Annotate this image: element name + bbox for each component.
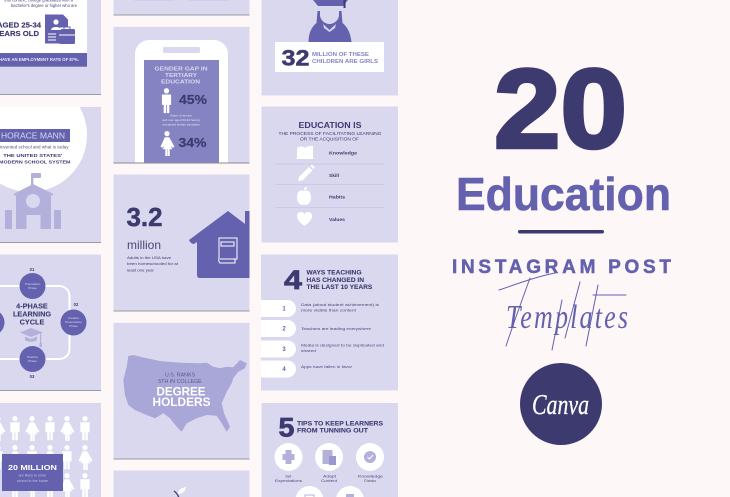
item 4 xyxy=(261,360,353,378)
callout: 20 million: 20 MILLION xyxy=(8,463,57,472)
text: school description: MODERN SCHOOL SYSTEM xyxy=(0,160,71,164)
icon: heart xyxy=(297,212,312,226)
heading: 4 ways: WAYS TEACHING xyxy=(306,270,362,276)
tip: knowledge checks xyxy=(356,443,384,483)
divider bar xyxy=(518,230,604,234)
icon: pencil xyxy=(298,164,315,181)
panel: Horace Mann xyxy=(0,107,101,243)
panel: gender gap phone xyxy=(114,26,250,164)
text: ranks: 5TH IN COLLEGE xyxy=(158,379,202,385)
item 1: more visible than content xyxy=(301,308,357,312)
tip: adapt content xyxy=(315,443,343,483)
stat: 3.2 million: 3.2 xyxy=(126,204,162,232)
heading: 4 ways xyxy=(284,265,373,295)
stat box: 32 million: 32 xyxy=(282,46,310,70)
panel: U.S. map xyxy=(114,322,250,460)
icon: book xyxy=(296,146,314,159)
stat box: 32 million xyxy=(275,42,384,72)
item 2: Teachers are leading everywhere xyxy=(301,326,371,331)
item: knowledge: Knowledge xyxy=(329,150,358,156)
stat: 3.2 million: million xyxy=(127,238,161,252)
item 1 xyxy=(261,300,379,317)
text: ranks: U.S. RANKS xyxy=(165,372,195,378)
heading: degree holders: DEGREE xyxy=(156,385,206,399)
heading: 4 ways: THE LAST 10 YEARS xyxy=(306,284,373,291)
map silhouette xyxy=(123,355,247,432)
icon: documents and briefcase xyxy=(45,14,75,44)
stat box: 32 million: MILLION OF THESE xyxy=(312,52,369,58)
heading: 5 tips: TIPS TO KEEP LEARNERS xyxy=(297,420,383,428)
script: templates: Templates xyxy=(506,298,628,336)
phase 4 xyxy=(0,310,4,336)
panel: homeschooled xyxy=(114,174,250,312)
callout: 20 million: are likely to enter xyxy=(18,474,47,478)
text: share description: and men aged 30-34 having xyxy=(162,118,200,122)
title: 4-phase learning cycle: 4-PHASE xyxy=(16,302,48,310)
heading: 5 tips xyxy=(278,412,383,442)
text: homeschool detail: Adults in the USA have xyxy=(127,255,171,260)
item 3: shared xyxy=(301,348,316,353)
phase 3: Phase xyxy=(28,359,37,363)
panel: top cropped xyxy=(114,0,250,16)
text: homeschool detail xyxy=(127,255,179,272)
heading: 5 tips: FROM TUNNING OUT xyxy=(297,428,368,434)
icon: school building xyxy=(5,173,61,229)
item 2 xyxy=(261,320,371,337)
heading: degree holders xyxy=(152,385,210,409)
heading: 5 tips: 5 xyxy=(278,412,294,442)
panel: 5 tips xyxy=(262,403,398,497)
tip: set expectations: Set xyxy=(285,474,292,478)
icon: apple xyxy=(297,187,311,205)
text: share description xyxy=(162,114,200,126)
heading: gender gap: EDUCATION xyxy=(161,80,200,86)
item: values: Values xyxy=(329,217,346,222)
title: 4-phase learning cycle: LEARNING xyxy=(13,310,51,318)
phase 2: Creative xyxy=(68,316,79,320)
phase 1 xyxy=(20,267,46,299)
banner: employment rate: HAVE AN EMPLOYMENT RATE OF 87%. xyxy=(0,57,79,62)
phase 2: Presentation xyxy=(65,320,82,324)
text: share description: completed tertiary education xyxy=(162,122,200,126)
people pictogram xyxy=(0,416,92,497)
title: 4-phase learning cycle xyxy=(13,302,51,326)
text: definition: THE PROCESS OF FACILITATING LEARNING xyxy=(278,131,382,136)
item 4: Apps have fallen in favor xyxy=(301,364,353,369)
title: 4-phase learning cycle: CYCLE xyxy=(20,318,44,326)
heading: aged 25-34 xyxy=(0,20,42,38)
name banner: HORACE MANN xyxy=(1,132,65,141)
panel: education is xyxy=(262,106,398,242)
item 3: 3 xyxy=(282,347,286,353)
icon: graduate xyxy=(308,0,352,42)
title: 20: 20 xyxy=(494,46,627,172)
item: skill: Skill xyxy=(329,173,339,178)
item: habits: Habits xyxy=(329,194,346,200)
panel: learning cycle xyxy=(0,254,101,391)
text: school description: invented school and what is today xyxy=(0,144,70,150)
heading: gender gap: TERTIARY xyxy=(165,73,197,79)
subtitle: instagram post: INSTAGRAM POST xyxy=(452,257,671,278)
phone body xyxy=(135,40,228,170)
heading: gender gap: GENDER GAP IN xyxy=(154,66,208,72)
text: ranks xyxy=(158,372,202,385)
icon: house with book xyxy=(189,211,250,278)
phase 3 xyxy=(20,346,46,379)
tip circles: second row xyxy=(296,486,364,497)
text: school description: THE UNITED STATES' xyxy=(3,153,62,158)
logo: canva xyxy=(520,363,602,445)
panel: 32 million girls xyxy=(262,0,398,96)
text: share description: Share of women xyxy=(170,114,192,118)
heading: gender gap xyxy=(154,66,208,86)
icon: woman xyxy=(160,131,174,156)
text: homeschool detail: been homeschooled for at xyxy=(127,261,179,266)
tip: knowledge checks: Knowledge xyxy=(358,474,383,478)
stat: 3.2 million xyxy=(126,204,162,252)
tip: set expectations: Expectations xyxy=(275,478,302,483)
stat: 34%: 34% xyxy=(178,136,206,150)
text: definition: OR THE ACQUISITION OF xyxy=(300,137,360,142)
panel: employment card xyxy=(0,0,101,95)
tip: adapt content: Adapt xyxy=(323,474,337,478)
script: templates xyxy=(499,273,628,350)
item 3 xyxy=(261,340,384,358)
heading: degree holders: HOLDERS xyxy=(152,395,210,409)
name banner xyxy=(0,129,70,142)
item 1: 1 xyxy=(282,306,286,312)
tip: adapt content: Content xyxy=(321,478,338,483)
phase 1: Phase xyxy=(28,286,37,290)
item 1: Data (about student achievement) is xyxy=(301,302,379,307)
panel: sprout cropped xyxy=(114,470,250,497)
panel: 4 ways teaching xyxy=(261,254,398,390)
text: homeschool detail: least one year xyxy=(127,268,155,272)
phase 2: 02 xyxy=(74,302,79,307)
callout: 20 million: school in the future xyxy=(17,479,48,483)
text: school description xyxy=(0,144,71,164)
item 2: 2 xyxy=(282,326,286,332)
callout: 20 million xyxy=(2,454,63,491)
text: degree intro: bachelor's degree or higher who are xyxy=(11,3,78,8)
phase 2: Phase xyxy=(69,324,78,328)
panel: 20 million people xyxy=(0,403,101,497)
tip: knowledge checks: Checks xyxy=(364,478,376,483)
stat: 45%: 45% xyxy=(179,93,207,107)
heading: 4 ways: HAS CHANGED IN xyxy=(306,277,364,284)
title: education: Education xyxy=(456,168,671,220)
phase 2 xyxy=(60,302,86,336)
phase 3: 03 xyxy=(30,374,35,379)
icon: man xyxy=(162,88,171,113)
item 3: Media is designed to be duplicated and xyxy=(301,342,384,348)
text: definition xyxy=(278,131,382,142)
stat box: 32 million: CHILDREN ARE GIRLS xyxy=(312,59,378,65)
text: degree intro xyxy=(4,0,78,8)
icon: graduation cap xyxy=(20,328,43,347)
phase 1: Preparation xyxy=(25,282,41,286)
phase 1: 01 xyxy=(30,267,35,272)
heading: 4 ways: 4 xyxy=(284,265,302,295)
logo: canva: Canva xyxy=(532,389,589,421)
heading: education is: EDUCATION IS xyxy=(298,121,362,130)
tip: set expectations xyxy=(274,443,302,483)
phase 3: Practice xyxy=(27,355,38,359)
item 4: 4 xyxy=(282,367,286,373)
